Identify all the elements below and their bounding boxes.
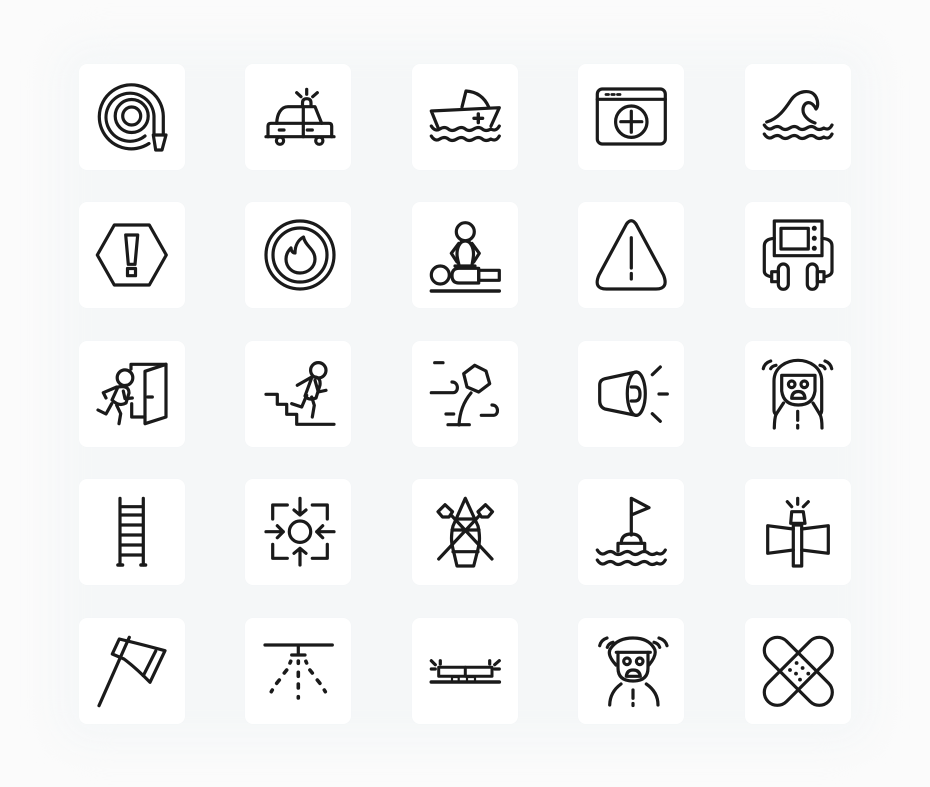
panel: buoy tile [578,479,684,585]
icon: assembly point [264,496,336,567]
panel: triangle warning tile [578,202,684,308]
panel: fire alarm tile [245,202,351,308]
panel: tsunami tile [744,64,850,170]
panel: rescue boat tile [412,64,518,170]
panel: police car tile [245,64,351,170]
icon: flame in circle [264,219,336,291]
panel: scared woman tile [744,341,850,447]
panel: stairs tile [245,341,351,447]
panel: ladder tile [79,479,185,585]
icon: crossed bandages [762,636,834,707]
icon: fire axe [97,636,167,708]
icon: scared man [598,636,669,708]
icon: scared woman [762,358,834,430]
icon: triangle warning [596,219,667,291]
icon: defibrillator [762,219,834,291]
panel: rowing boat tile [412,479,518,585]
panel: windstorm tile [412,341,518,447]
panel: hexagon warning tile [79,202,185,308]
panel: fire hose tile [79,64,185,170]
icon: fire hose [98,83,168,152]
panel: emergency exit tile [79,341,185,447]
panel: bandage tile [744,618,850,724]
icon: emergency light bar [430,659,502,684]
panel: scared man tile [578,618,684,724]
icon: tsunami wave [762,90,834,140]
icon: rowing boat [436,496,494,568]
icon: police car [264,88,336,146]
panel: assembly point tile [245,479,351,585]
icon: person running downstairs [264,361,336,426]
icon: tree in wind [430,361,500,427]
icon: ladder [116,496,148,567]
panel: CPR tile [412,202,518,308]
panel: fire axe tile [79,618,185,724]
icon: siren post [766,496,830,568]
icon: person leaving through door [96,362,168,426]
icon: buoy with flag [596,496,667,566]
panel: light bar tile [412,618,518,724]
panel: siren post tile [744,479,850,585]
panel: megaphone tile [578,341,684,447]
panel: defibrillator tile [744,202,850,308]
icon: megaphone [598,365,669,423]
icon: hexagon warning [96,223,168,287]
panel: browser medical tile [578,64,684,170]
icon: rescue boat [430,89,501,142]
icon: CPR [430,221,501,293]
icon: browser with plus [596,87,667,146]
panel: sprinkler tile [245,618,351,724]
icon: ceiling sprinkler [263,643,334,700]
